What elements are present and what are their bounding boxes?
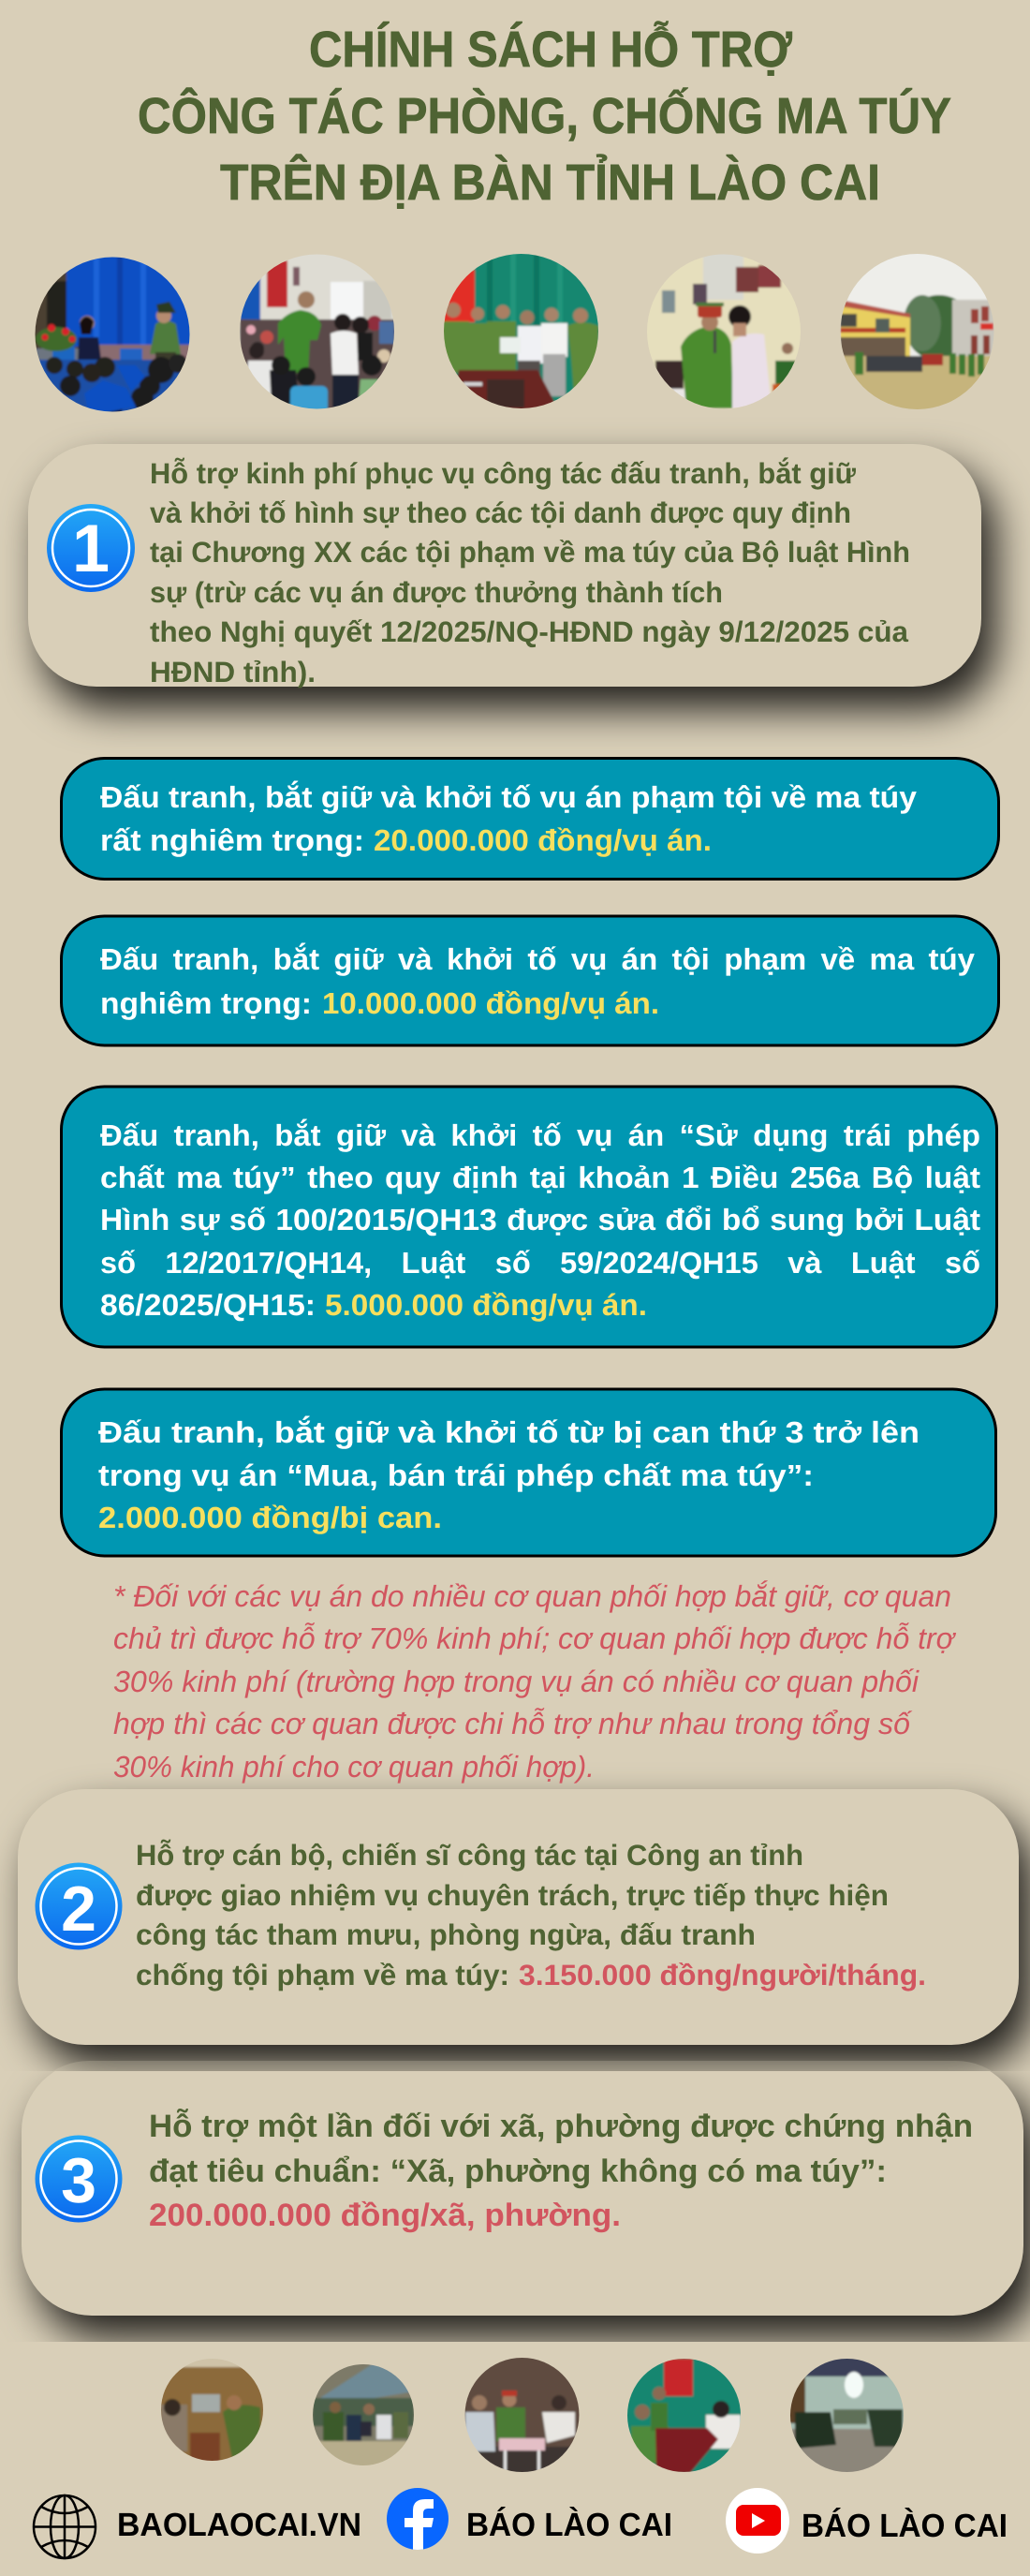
photo: night meeting in hall [790, 2359, 904, 2472]
facebook label: BÁO LÀO CAI [466, 2506, 672, 2543]
icon: badge 2 [36, 1862, 122, 1950]
panel 1 text: và khởi tố hình sự theo các tội danh được quy định [150, 496, 851, 529]
photo: officer among students [240, 255, 394, 408]
photo: award handover with officers [444, 254, 598, 408]
panel 2 text: được giao nhiệm vụ chuyên trách, trực tiếp thực hiện [136, 1879, 889, 1912]
box: 10.000.000: nghiêm trọng: [100, 986, 312, 1020]
footnote: hợp thì các cơ quan được chi hỗ trợ như nhau trong tổng số [113, 1707, 913, 1740]
box: 10.000.000 [62, 916, 998, 1045]
footnote: * Đối với các vụ án do nhiều cơ quan phối hợp bắt giữ, cơ quan [113, 1579, 951, 1613]
icon: badge 1: 1 [72, 511, 110, 586]
box: 5.000.000: số 12/2017/QH14, Luật số 59/2024/QH15 và Luật số [100, 1246, 980, 1280]
icon: youtube [726, 2488, 789, 2554]
box: 2.000.000: Đấu tranh, bắt giữ và khởi tố từ bị can thứ 3 trở lên [98, 1415, 920, 1449]
box: 2.000.000 [62, 1389, 996, 1556]
icon: facebook [387, 2488, 449, 2550]
photo: youth audience and officer on stage [36, 257, 189, 412]
photo: officer visiting two residents [464, 2358, 579, 2472]
box: 5.000.000: Đấu tranh, bắt giữ và khởi tố vụ án “Sử dụng trái phép [100, 1118, 980, 1152]
box: 5.000.000: chất ma túy” theo quy định tại khoản 1 Điều 256a Bộ luật [100, 1161, 980, 1194]
box: 5.000.000: Hình sự số 100/2015/QH13 được sửa đổi bổ sung bởi Luật [100, 1203, 980, 1236]
panel 3: one-off commune support [0, 2061, 1030, 2342]
website label: BAOLAOCAI.VN [117, 2507, 361, 2543]
panel 1 text: theo Nghị quyết 12/2025/NQ-HĐND ngày 9/12/2025 của [150, 615, 909, 648]
panel 3 text: 200.000.000 đồng/xã, phường. [149, 2198, 621, 2233]
panel 3 text [149, 2109, 973, 2233]
box: 5.000.000: 86/2025/QH15: [100, 1288, 316, 1322]
panel 1 text: Hỗ trợ kinh phí phục vụ công tác đấu tranh, bắt giữ [150, 457, 857, 490]
box: 20.000.000 [62, 759, 998, 879]
photo: home visit in wooden room [161, 2359, 263, 2461]
box: 2.000.000: trong vụ án “Mua, bán trái phép chất ma túy”: [98, 1458, 814, 1492]
icon: globe [34, 2495, 96, 2558]
panel 1 text: HĐND tỉnh). [150, 656, 316, 688]
panel 2 text: công tác tham mưu, phòng ngừa, đấu tranh [136, 1918, 756, 1951]
box: 10.000.000: Đấu tranh, bắt giữ và khởi tố vụ án tội phạm về ma túy [100, 942, 975, 976]
panel 2 text: 3.150.000 đồng/người/tháng. [519, 1959, 926, 1991]
icon: badge 1 [47, 504, 135, 592]
box: 10.000.000: 10.000.000 đồng/vụ án. [322, 986, 659, 1020]
title: CHÍNH SÁCH HỖ TRỢ [309, 21, 792, 78]
panel 2 text [136, 1839, 926, 1991]
panel 1: funding for investigation [28, 444, 995, 709]
icon: badge 3: 3 [61, 2145, 96, 2216]
panel 1 text: tại Chương XX các tội phạm về ma túy của Bộ luật Hình [150, 536, 910, 569]
box: 5.000.000: 5.000.000 đồng/vụ án. [325, 1288, 647, 1322]
box: 5.000.000 [62, 1087, 996, 1347]
box: 20.000.000: Đấu tranh, bắt giữ và khởi tố vụ án phạm tội về ma túy [100, 780, 917, 814]
title: TRÊN ĐỊA BÀN TỈNH LÀO CAI [220, 154, 880, 211]
icon: badge 3 [36, 2136, 122, 2222]
panel 3 text: đạt tiêu chuẩn: “Xã, phường không có ma túy”: [149, 2154, 887, 2189]
photo: police lined up in front of commune building [841, 254, 994, 409]
footnote [113, 1579, 957, 1784]
panel 2 text: Hỗ trợ cán bộ, chiến sĩ công tác tại Công an tỉnh [136, 1839, 803, 1872]
panel 1 text [150, 457, 910, 688]
box: 20.000.000: rất nghiêm trọng: [100, 823, 364, 857]
panel 2 text: chống tội phạm về ma túy: [136, 1959, 509, 1991]
panel 3 text: Hỗ trợ một lần đối với xã, phường được chứng nhận [149, 2109, 973, 2144]
box: 20.000.000: 20.000.000 đồng/vụ án. [374, 823, 712, 857]
title: CÔNG TÁC PHÒNG, CHỐNG MA TÚY [138, 87, 951, 144]
title [138, 21, 951, 211]
footnote: chủ trì được hỗ trợ 70% kinh phí; cơ quan phối hợp được hỗ trợ [113, 1621, 957, 1655]
icon: badge 2: 2 [61, 1873, 96, 1945]
panel 1 text: sự (trừ các vụ án được thưởng thành tích [150, 576, 723, 609]
box: 2.000.000: 2.000.000 đồng/bị can. [98, 1501, 442, 1534]
panel 2: monthly support [18, 1789, 1030, 2067]
youtube label: BÁO LÀO CAI [802, 2507, 1008, 2544]
photo: meeting around red table [627, 2359, 741, 2472]
photo: officer with student and microphone [647, 255, 801, 408]
footnote: 30% kinh phí cho cơ quan phối hợp). [113, 1750, 595, 1784]
photo: meeting under corrugated roof [313, 2364, 414, 2465]
footnote: 30% kinh phí (trường hợp trong vụ án có nhiều cơ quan phối [113, 1665, 920, 1698]
